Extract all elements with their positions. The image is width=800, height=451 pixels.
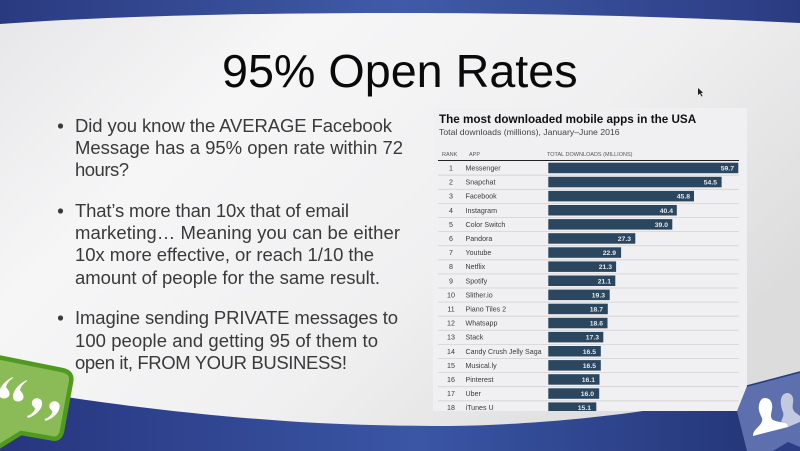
rank column: 15 (447, 362, 455, 370)
bullet 3 (58, 307, 398, 373)
chart title: The most downloaded mobile apps in the USA (439, 113, 697, 126)
bullet 1: Message has a 95% open rate within 72 (75, 137, 403, 158)
rank column (447, 164, 455, 412)
rank column: 18 (447, 404, 455, 412)
app column: Stack (466, 334, 484, 342)
app column: Youtube (466, 249, 491, 257)
rank column: 1 (449, 164, 453, 172)
bar values: 16.5 (583, 363, 596, 370)
app column: Facebook (466, 193, 497, 201)
app column: Color Switch (466, 221, 505, 229)
panel: most downloaded apps chart (433, 108, 747, 412)
bar values: 21.3 (599, 264, 612, 271)
app column: iTunes U (466, 404, 494, 412)
bar values: 17.3 (586, 335, 599, 342)
app column: Spotify (466, 277, 488, 285)
table header (442, 152, 633, 158)
bar values: 15.1 (578, 405, 591, 412)
table header: TOTAL DOWNLOADS (MILLIONS) (547, 152, 633, 158)
title: 95% Open Rates (222, 45, 578, 97)
app column: Instagram (466, 207, 497, 215)
bar chart (548, 163, 738, 411)
table header: APP (469, 152, 480, 158)
app column: Netflix (466, 263, 486, 271)
rank column: 12 (447, 320, 455, 328)
app column: Candy Crush Jelly Saga (466, 348, 542, 356)
bar values: 16.0 (581, 391, 594, 398)
bullet 1 (58, 115, 403, 180)
app column: Uber (466, 390, 482, 398)
rank column: 10 (447, 291, 455, 299)
bottom blue band (0, 372, 800, 451)
app column: Whatsapp (466, 320, 497, 328)
rank column: 11 (447, 306, 455, 314)
bar values: 21.1 (598, 278, 611, 285)
bar values: 22.9 (603, 250, 616, 257)
icon: green speech bubble with quotes (0, 356, 71, 451)
bullet 2 (58, 200, 400, 288)
bar values (578, 166, 734, 412)
rank column: 16 (447, 376, 455, 384)
rank column: 2 (449, 179, 453, 187)
bar values: 45.8 (677, 194, 690, 201)
app column: Snapchat (466, 179, 496, 187)
app column: Musical.ly (466, 362, 497, 370)
bullet 2: marketing… Meaning you can be either (75, 222, 400, 243)
rank column: 6 (449, 235, 453, 243)
bar values: 59.7 (721, 166, 734, 172)
bullet 3: Imagine sending PRIVATE messages to (75, 307, 398, 328)
bullet 3: 100 people and getting 95 of them to (75, 330, 378, 351)
bar values: 54.5 (704, 180, 717, 187)
top blue band (0, 0, 800, 24)
bullet 3: open it, FROM YOUR BUSINESS! (75, 352, 347, 373)
table header: RANK (442, 152, 458, 158)
bullet 1: Did you know the AVERAGE Facebook (75, 115, 393, 136)
chart subtitle: Total downloads (millions), January–June 2016 (439, 127, 620, 137)
bar values: 18.7 (590, 306, 603, 314)
bar values: 40.4 (660, 208, 673, 215)
back person (781, 393, 800, 427)
app column: Slither.io (466, 291, 493, 299)
rank column: 9 (449, 277, 453, 285)
rank column: 14 (447, 348, 455, 356)
rank column: 3 (449, 193, 453, 201)
app column: Messenger (466, 164, 501, 172)
rank column: 5 (449, 221, 453, 229)
app column: Piano Tiles 2 (466, 306, 506, 314)
rank column: 4 (449, 207, 453, 215)
icon: mouse cursor (698, 88, 703, 96)
rank column: 17 (447, 390, 455, 398)
bar values: 39.0 (655, 222, 668, 229)
bullet 2: 10x more effective, or reach 1/10 the (75, 244, 374, 265)
bullet 2: amount of people for the same result. (75, 267, 380, 288)
app column: Pinterest (466, 376, 494, 384)
front person (753, 398, 788, 436)
bullet list (58, 115, 403, 373)
bar values: 18.6 (590, 321, 603, 328)
bullet 2: That’s more than 10x that of email (75, 200, 349, 221)
rank column: 13 (447, 334, 455, 342)
badge tail shadow (773, 442, 800, 451)
bar values: 16.5 (583, 349, 596, 356)
rank column: 7 (449, 249, 453, 257)
bar values: 19.3 (592, 292, 605, 299)
bar values: 27.3 (618, 236, 631, 243)
bar values: 16.1 (582, 377, 595, 384)
app column: Pandora (466, 235, 492, 243)
bullet 1: hours? (75, 159, 129, 180)
icon: blue friends badge (737, 372, 800, 451)
table rows (447, 164, 542, 412)
rank column: 8 (449, 263, 453, 271)
app column (466, 164, 542, 412)
